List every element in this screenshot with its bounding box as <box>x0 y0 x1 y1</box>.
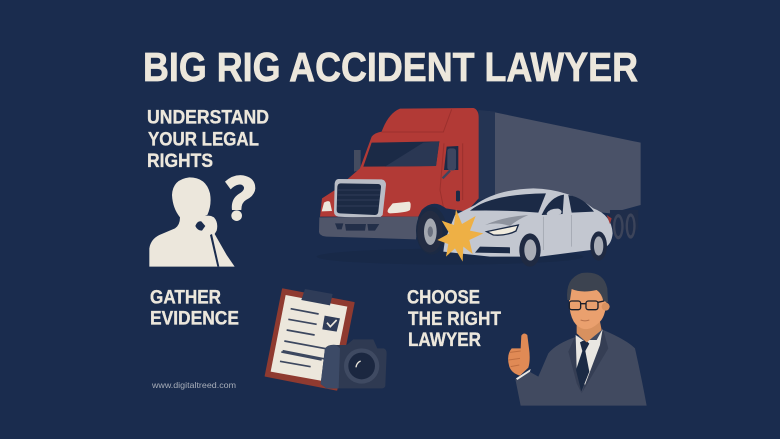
grille <box>334 179 386 219</box>
windshield <box>363 141 439 167</box>
car headlight <box>487 225 518 235</box>
door window <box>444 146 458 170</box>
heading: choose the right lawyer: CHOOSE <box>407 286 480 308</box>
heading: understand your legal rights: RIGHTS <box>147 151 213 172</box>
heading: understand your legal rights <box>147 108 269 172</box>
heading: understand your legal rights: UNDERSTAND <box>147 108 269 128</box>
door line <box>440 143 463 207</box>
suit <box>515 330 647 406</box>
icon: question mark <box>225 175 255 221</box>
truck cab <box>319 108 479 255</box>
clipboard <box>265 289 354 390</box>
heading: choose the right lawyer: LAWYER <box>408 329 481 351</box>
car <box>443 188 613 267</box>
icon: impact star <box>437 209 483 262</box>
heading: gather evidence: EVIDENCE <box>150 308 239 330</box>
heading: choose the right lawyer <box>407 286 501 351</box>
trailer <box>478 110 641 239</box>
headlights <box>322 201 332 211</box>
heading: gather evidence: GATHER <box>150 286 221 308</box>
head <box>569 285 607 329</box>
hand with thumb up <box>508 333 531 380</box>
front wheel <box>416 207 447 255</box>
heading: choose the right lawyer: THE RIGHT <box>408 308 501 330</box>
shirt and tie <box>576 329 603 385</box>
illustration: lawyer giving thumbs up <box>508 273 647 406</box>
bumper <box>319 217 418 239</box>
checkbox <box>322 316 340 332</box>
title: BIG RIG ACCIDENT LAWYER <box>143 44 638 90</box>
heading: gather evidence <box>150 286 239 330</box>
camera <box>321 339 387 388</box>
hair <box>567 273 608 302</box>
illustration: truck and car collision <box>317 108 641 267</box>
heading: understand your legal rights: YOUR LEGAL <box>148 130 259 150</box>
neck <box>577 322 602 342</box>
website url: www.digitaltreed.com <box>151 380 236 390</box>
mirror <box>354 150 361 172</box>
icon: clipboard and camera <box>265 289 387 390</box>
icon: thinking person with question mark <box>149 175 255 267</box>
ground shadow <box>317 249 583 265</box>
glasses <box>569 301 604 310</box>
